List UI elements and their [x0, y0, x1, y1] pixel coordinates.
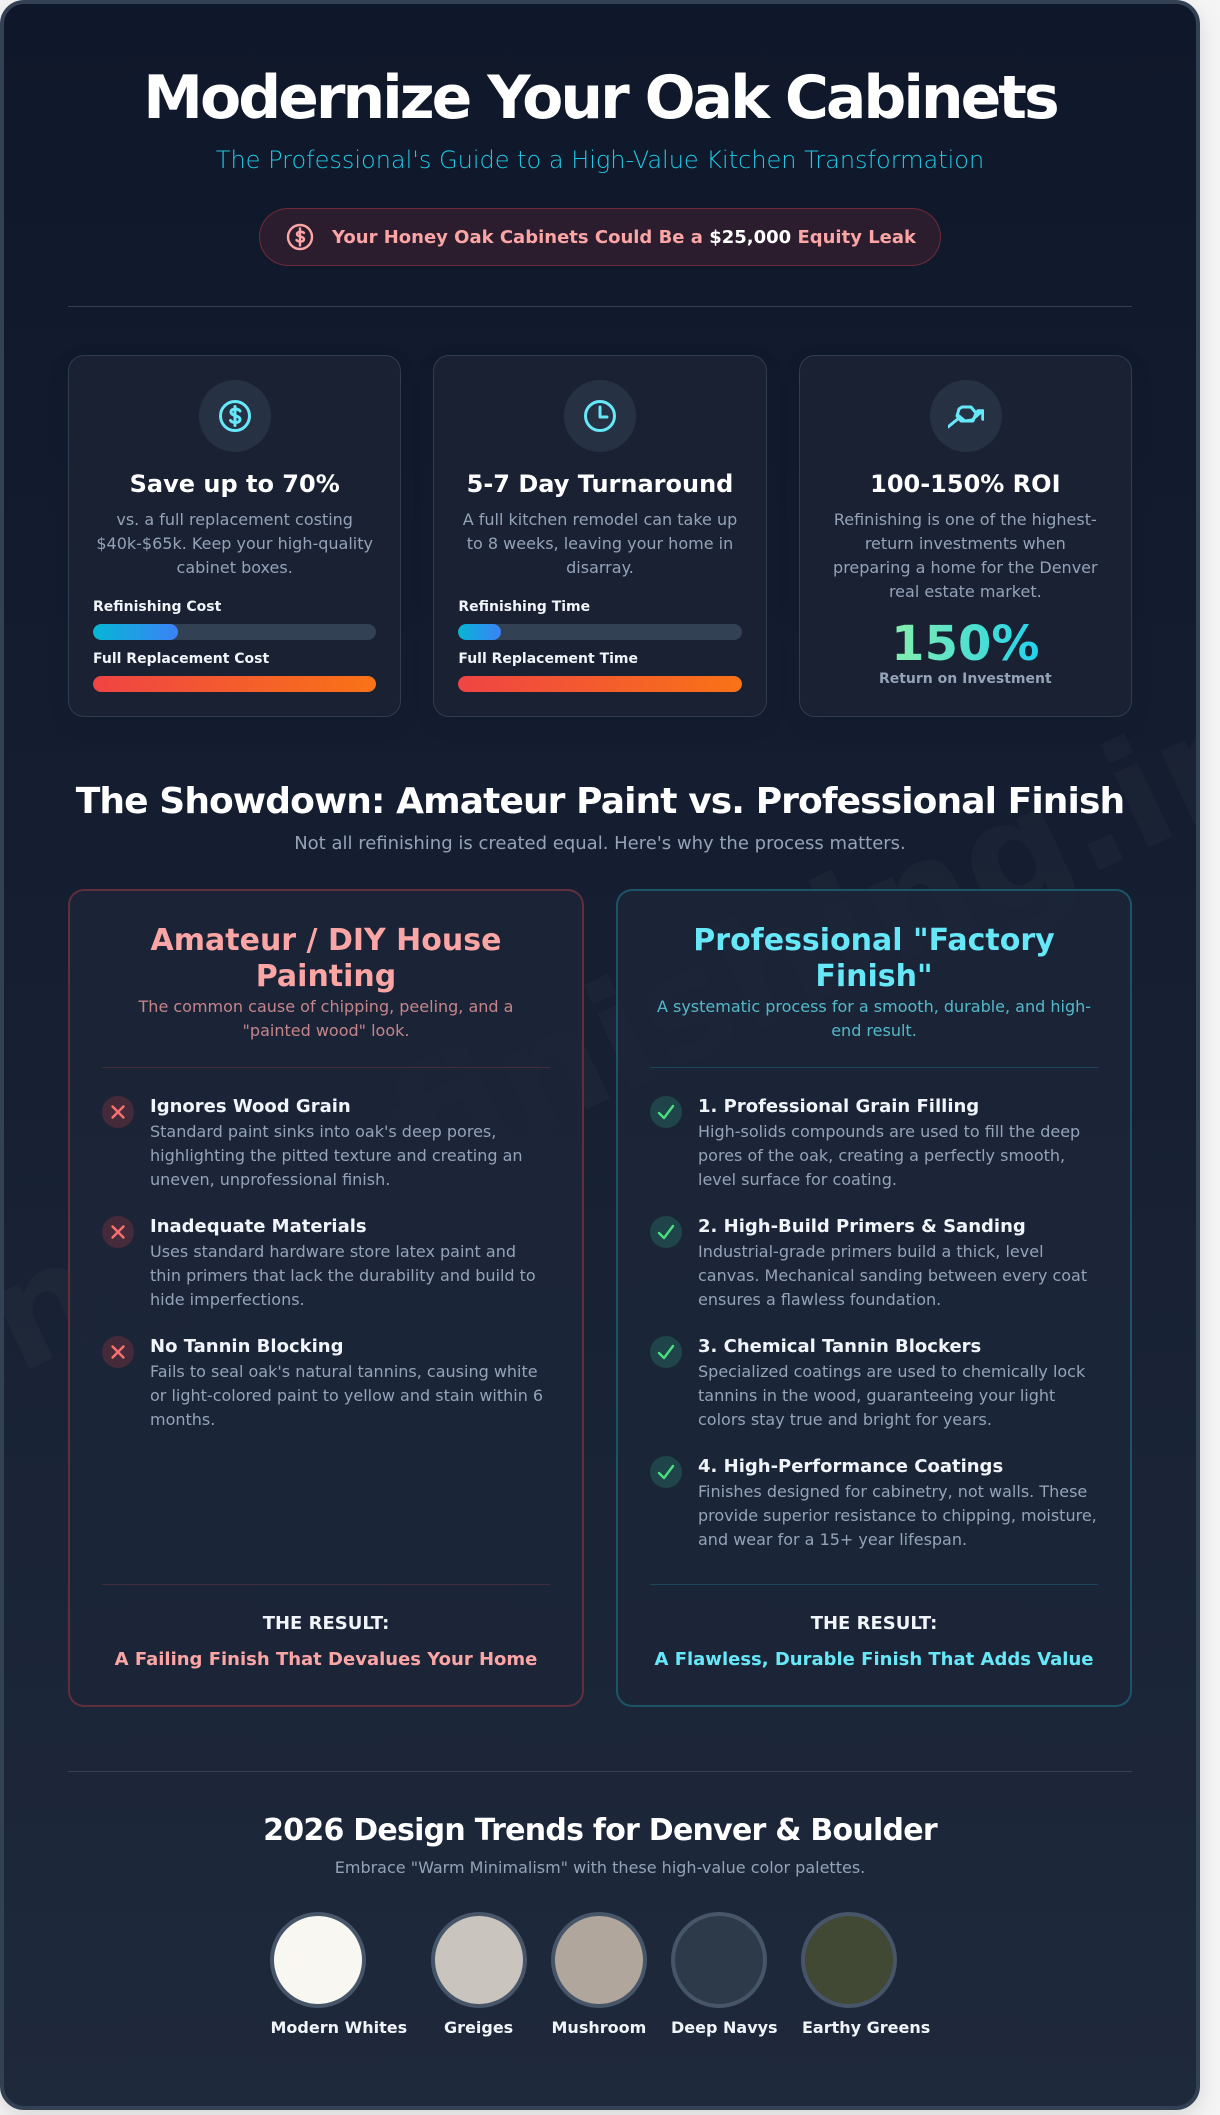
item: wood grain [102, 1096, 523, 1189]
callout: equity leak [259, 208, 941, 266]
item title: 4. High-Performance Coatings [698, 1456, 1003, 1477]
result label: THE RESULT: [811, 1613, 937, 1634]
label: refinishing cost: Refinishing Cost [93, 599, 221, 615]
item text: Specialized coatings are used to chemically lock tannins in the wood, guaranteeing your light colors stay true and bright for years. [698, 1362, 1085, 1429]
icon: check [650, 1336, 682, 1368]
card text: A full kitchen remodel can take up to 8 weeks, leaving your home in disarray. [463, 510, 737, 577]
icon: dollar circle [286, 224, 314, 250]
panel subtitle: The common cause of chipping, peeling, and a "painted wood" look. [139, 997, 513, 1040]
label: refinishing time: Refinishing Time [458, 599, 590, 615]
icon: clock [564, 380, 636, 452]
bar: refinishing time [458, 624, 742, 640]
card heading: Save up to 70% [130, 470, 340, 498]
item text: Industrial-grade primers build a thick, level canvas. Mechanical sanding between every coat ensures a flawless foundation. [698, 1242, 1087, 1309]
section heading: design trends: 2026 Design Trends for Denver & Boulder [263, 1813, 937, 1848]
label: modern whites: Modern Whites [270, 2018, 407, 2037]
item: grain filling [650, 1096, 1080, 1189]
callout: equity leak: Your Honey Oak Cabinets Could Be a $25,000 Equity Leak [332, 227, 916, 248]
panel: professional [616, 889, 1132, 1707]
icon: check [650, 1096, 682, 1128]
item: tannin blockers [650, 1336, 1086, 1429]
item: coatings [650, 1456, 1097, 1549]
icon: cross [102, 1096, 134, 1128]
item title: 2. High-Build Primers & Sanding [698, 1216, 1026, 1237]
panel: turnaround [433, 355, 767, 717]
item: tannin [102, 1336, 543, 1429]
swatch: greiges [431, 1912, 527, 2008]
card text: vs. a full replacement costing $40k-$65k. Keep your high-quality cabinet boxes. [96, 510, 373, 577]
label: deep navys: Deep Navys [671, 2018, 778, 2037]
bar: refinishing cost [93, 624, 376, 640]
swatch: earthy greens [801, 1912, 897, 2008]
section subheading: Not all refinishing is created equal. Here's why the process matters. [294, 833, 906, 854]
item text: Fails to seal oak's natural tannins, causing white or light-colored paint to yellow and stain within 6 months. [150, 1362, 543, 1429]
swatch: deep navys [671, 1912, 767, 2008]
swatch: modern whites [270, 1912, 366, 2008]
label: mushroom: Mushroom [552, 2018, 646, 2037]
title: Modernize Your Oak Cabinets [143, 63, 1057, 133]
bar: replacement cost [93, 676, 376, 692]
label: earthy greens: Earthy Greens [802, 2018, 930, 2037]
icon: cross [102, 1336, 134, 1368]
label: replacement time: Full Replacement Time [458, 651, 638, 667]
card heading: 5-7 Day Turnaround [467, 470, 733, 498]
swatch: mushroom [551, 1912, 647, 2008]
item: primers [650, 1216, 1087, 1309]
item title: Ignores Wood Grain [150, 1096, 351, 1117]
item text: Finishes designed for cabinetry, not walls. These provide superior resistance to chipping, moisture, and wear for a 15+ year lifespan. [698, 1482, 1097, 1549]
card heading: 100-150% ROI [870, 470, 1060, 498]
section heading: showdown: The Showdown: Amateur Paint vs. Professional Finish [76, 781, 1124, 822]
subtitle: The Professional's Guide to a High-Value Kitchen Transformation [216, 146, 984, 174]
item title: 1. Professional Grain Filling [698, 1096, 979, 1117]
big stat: 150% [891, 616, 1039, 672]
icon: growth chart [930, 380, 1002, 452]
panel subtitle: A systematic process for a smooth, durable, and high-end result. [657, 997, 1091, 1040]
section subheading: Embrace "Warm Minimalism" with these high-value color palettes. [335, 1858, 865, 1877]
panel: amateur [68, 889, 584, 1707]
icon: check [650, 1216, 682, 1248]
panel title: Amateur / DIY House Painting [151, 923, 501, 994]
label: greiges: Greiges [444, 2018, 513, 2037]
panel: save up to 70% [68, 355, 401, 717]
icon: cross [102, 1216, 134, 1248]
item title: Inadequate Materials [150, 1216, 367, 1237]
card text: Refinishing is one of the highest-return investments when preparing a home for the Denver real estate market. [833, 510, 1098, 601]
result value: A Flawless, Durable Finish That Adds Value [654, 1649, 1093, 1670]
panel: ROI [799, 355, 1132, 717]
item title: No Tannin Blocking [150, 1336, 343, 1357]
result label: THE RESULT: [263, 1613, 389, 1634]
stat caption: Return on Investment [879, 671, 1052, 687]
result value: A Failing Finish That Devalues Your Home [115, 1649, 537, 1670]
icon: check [650, 1456, 682, 1488]
item: materials [102, 1216, 536, 1309]
bar: replacement time [458, 676, 742, 692]
panel title: Professional "Factory Finish" [693, 923, 1055, 994]
item text: High-solids compounds are used to fill the deep pores of the oak, creating a perfectly smooth, level surface for coating. [698, 1122, 1080, 1189]
item text: Standard paint sinks into oak's deep pores, highlighting the pitted texture and creating an uneven, unprofessional finish. [150, 1122, 523, 1189]
label: replacement cost: Full Replacement Cost [93, 651, 269, 667]
item text: Uses standard hardware store latex paint and thin primers that lack the durability and build to hide imperfections. [150, 1242, 536, 1309]
icon: dollar [199, 380, 271, 452]
item title: 3. Chemical Tannin Blockers [698, 1336, 981, 1357]
